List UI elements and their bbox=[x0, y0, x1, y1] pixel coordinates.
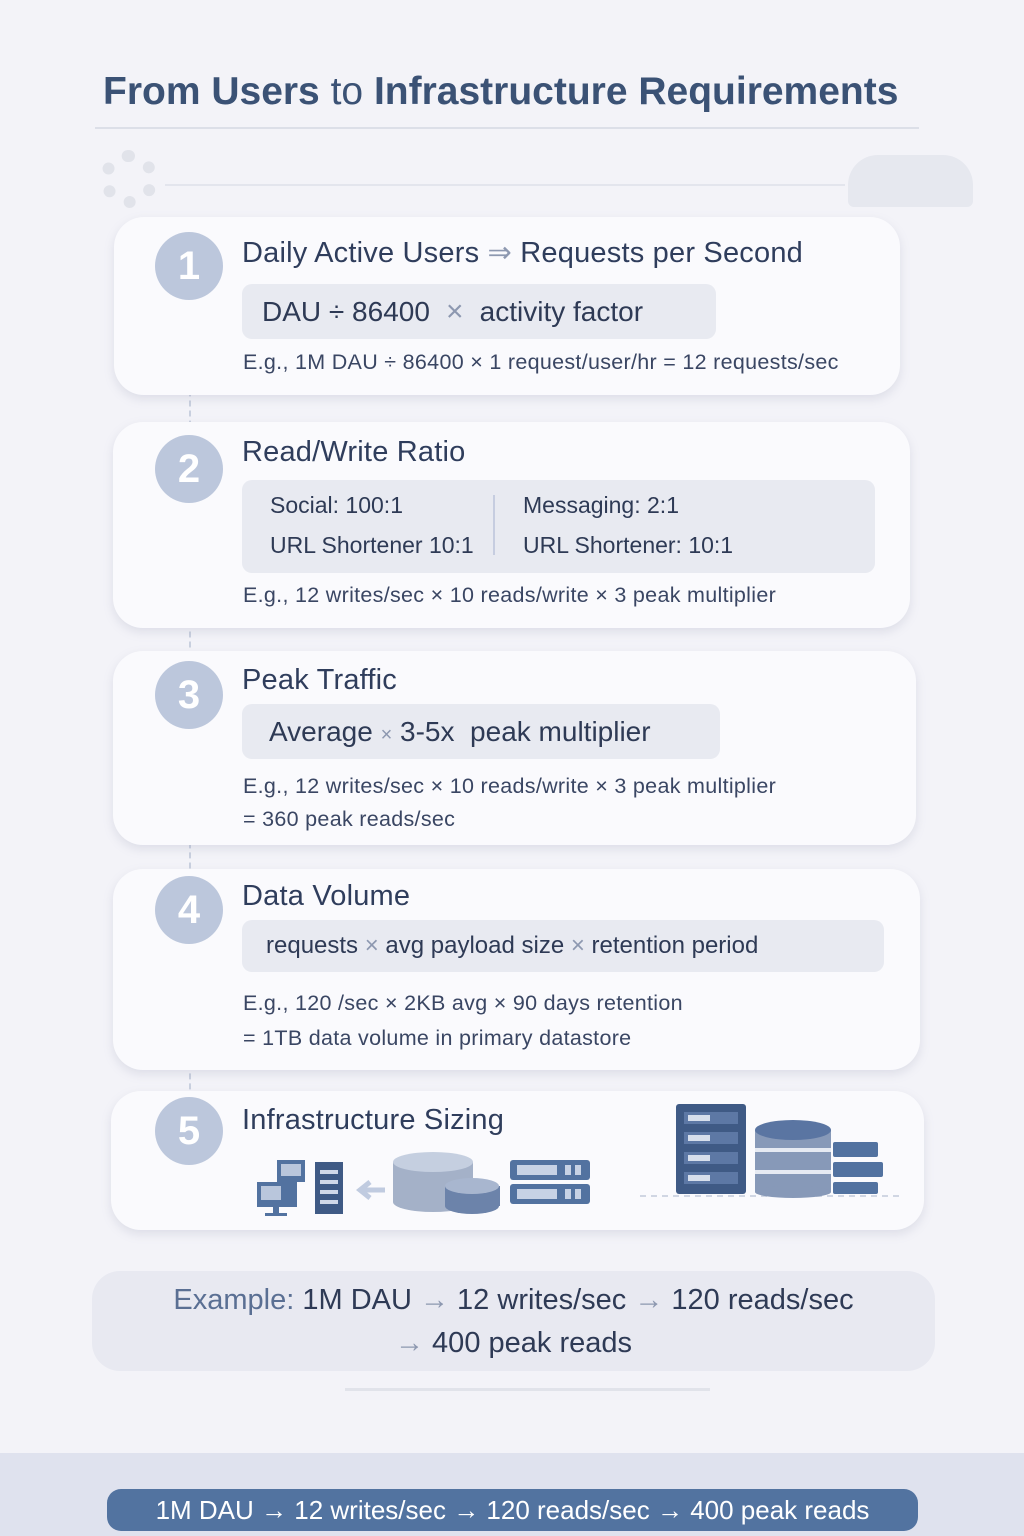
example 3: = 360 peak reads/sec bbox=[243, 807, 455, 831]
footer band bbox=[0, 1453, 1024, 1536]
panel 2 bbox=[113, 422, 910, 628]
heading 4: Data Volume bbox=[242, 880, 410, 912]
icon group: client to database bbox=[257, 1152, 590, 1216]
title: From Users to Infrastructure Requirements bbox=[103, 70, 898, 113]
example summary: → 400 peak reads bbox=[395, 1327, 632, 1359]
badge 3: 3 bbox=[178, 673, 200, 717]
icon: gear bbox=[100, 150, 158, 208]
formula 3: Average × 3-5x peak multiplier bbox=[269, 716, 651, 747]
heading 3: Peak Traffic bbox=[242, 664, 397, 696]
formula 1: DAU ÷ 86400 × activity factor bbox=[262, 295, 643, 328]
heading 1: Daily Active Users ⇒ Requests per Second bbox=[242, 237, 803, 269]
example 3 bbox=[243, 774, 776, 831]
ratios table: URL Shortener: 10:1 bbox=[523, 532, 733, 558]
ratios table: Social: 100:1 bbox=[270, 492, 403, 518]
ratios table: URL Shortener 10:1 bbox=[270, 532, 474, 558]
badge 1: 1 bbox=[178, 244, 200, 288]
decorative connector line bbox=[165, 184, 845, 186]
badge 2 bbox=[155, 435, 223, 503]
footer pill: 1M DAU → 12 writes/sec → 120 reads/sec → 400 peak reads bbox=[156, 1495, 869, 1525]
icon: cloud bbox=[848, 155, 973, 207]
panel 4 bbox=[113, 869, 920, 1070]
panel 3 bbox=[113, 651, 916, 845]
ratios table: Messaging: 2:1 bbox=[523, 492, 679, 518]
example 3: E.g., 12 writes/sec × 10 reads/write × 3 peak multiplier bbox=[243, 774, 776, 798]
example 4 bbox=[243, 991, 683, 1050]
badge 2: 2 bbox=[178, 447, 200, 491]
example 2: E.g., 12 writes/sec × 10 reads/write × 3 peak multiplier bbox=[243, 583, 776, 607]
badge 3 bbox=[155, 661, 223, 729]
example 4: = 1TB data volume in primary datastore bbox=[243, 1026, 631, 1050]
ratios table bbox=[242, 480, 875, 573]
footer pill bbox=[107, 1489, 918, 1531]
formula 1 bbox=[242, 284, 716, 339]
example summary bbox=[92, 1271, 935, 1371]
heading 2: Read/Write Ratio bbox=[242, 436, 465, 468]
formula 3 bbox=[242, 704, 720, 759]
panel 1 bbox=[114, 217, 900, 395]
badge 4: 4 bbox=[178, 888, 200, 932]
badge 5: 5 bbox=[178, 1109, 200, 1153]
icon group: server rack and database bbox=[640, 1104, 899, 1198]
example 4: E.g., 120 /sec × 2KB avg × 90 days retention bbox=[243, 991, 683, 1015]
example 1: E.g., 1M DAU ÷ 86400 × 1 request/user/hr = 12 requests/sec bbox=[243, 350, 839, 374]
heading 5: Infrastructure Sizing bbox=[242, 1104, 504, 1136]
example summary: Example: 1M DAU → 12 writes/sec → 120 reads/sec bbox=[173, 1284, 854, 1316]
formula 4: requests × avg payload size × retention period bbox=[266, 932, 758, 959]
formula 4 bbox=[242, 920, 884, 972]
badge 1 bbox=[155, 232, 223, 300]
panel 5 bbox=[111, 1091, 924, 1230]
badge 4 bbox=[155, 876, 223, 944]
badge 5 bbox=[155, 1097, 223, 1165]
timeline bbox=[189, 290, 191, 1220]
